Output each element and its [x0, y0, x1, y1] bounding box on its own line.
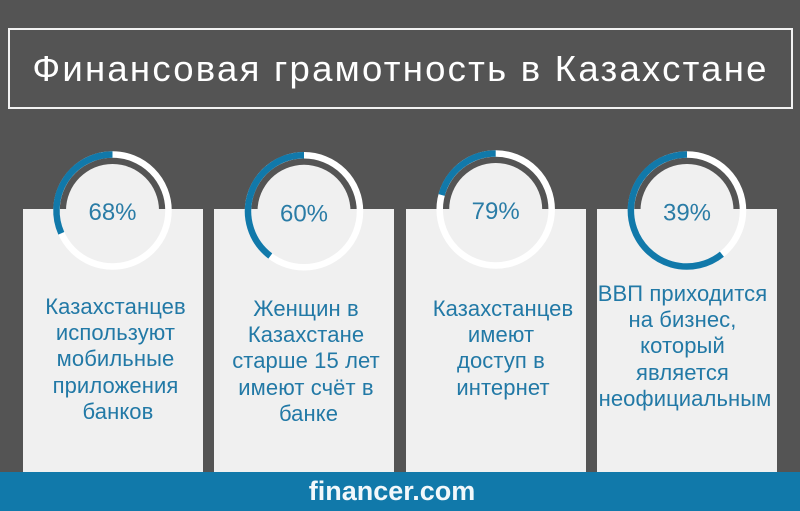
text: card 1: Казахстанцев — [45, 294, 186, 319]
ring: 60% — [248, 155, 360, 267]
text: card 4: является — [636, 360, 729, 385]
text: card 1: банков — [83, 399, 153, 424]
text: card 3: интернет — [456, 375, 550, 400]
text: card 4: ВВП приходится — [598, 281, 767, 306]
text: card 2: имеют счёт в — [238, 375, 374, 400]
footer: brand bar — [0, 472, 800, 511]
text: card 1 — [45, 294, 186, 424]
text: card 4: неофициальным — [599, 386, 771, 411]
panel: card 3 background — [406, 209, 586, 472]
text: card 1: мобильные — [57, 346, 174, 371]
footer: brand bar: financer.com — [309, 476, 475, 506]
text: card 4: который — [640, 333, 725, 358]
panel: card 4 background — [597, 209, 777, 472]
ring: 79% — [440, 154, 552, 266]
panel: card 1 background — [23, 209, 203, 472]
text: card 3 — [433, 296, 573, 400]
text: card 2: банке — [279, 401, 338, 426]
ring: 39%: 39% — [663, 200, 711, 226]
text: card 3: Казахстанцев — [433, 296, 573, 321]
text: card 2: Женщин в — [253, 296, 359, 321]
panel: card 2 background — [214, 209, 394, 472]
ring: 68% — [56, 154, 168, 266]
text: card 4 — [598, 281, 771, 411]
text: card 1: используют — [56, 320, 175, 345]
ring: 39% — [631, 154, 743, 266]
text: card 2 — [232, 296, 380, 426]
ring: 68%: 68% — [88, 199, 137, 226]
text: card 2: старше 15 лет — [232, 348, 380, 373]
text: card 2: Казахстане — [248, 322, 364, 347]
ring: 79%: 79% — [472, 198, 520, 225]
title — [8, 28, 793, 109]
text: card 3: доступ в — [457, 348, 545, 373]
ring: 60%: 60% — [280, 200, 328, 228]
text: card 3: имеют — [468, 322, 534, 347]
text: card 4: на бизнес, — [628, 307, 736, 332]
text: card 1: приложения — [53, 373, 178, 398]
title: Финансовая грамотность в Казахстане — [32, 48, 769, 89]
